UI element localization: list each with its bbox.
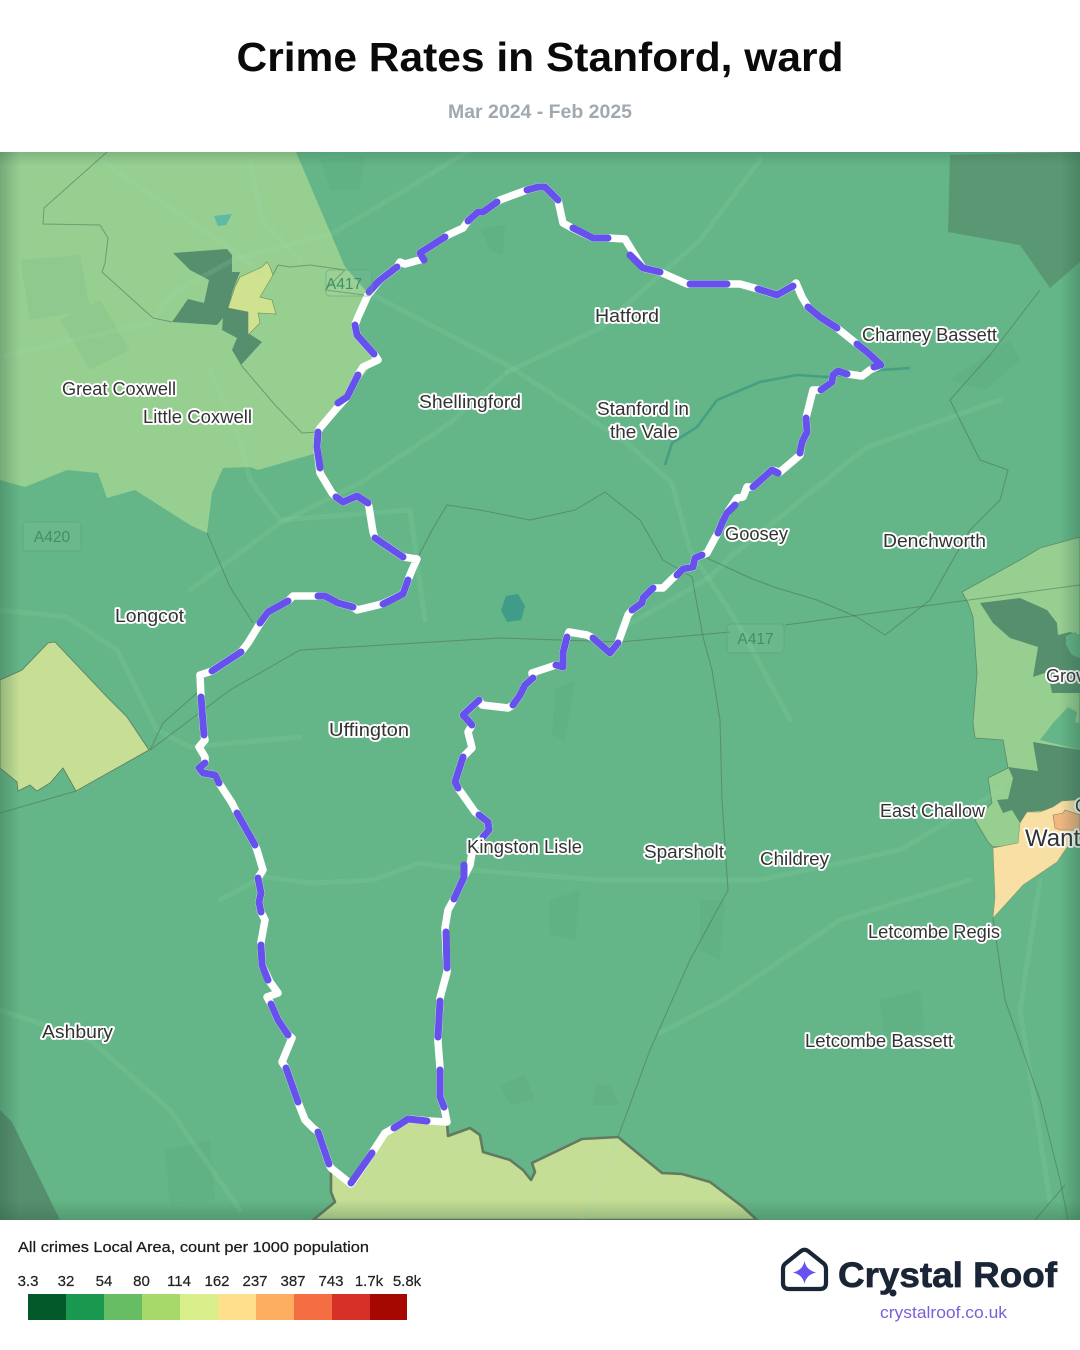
region: dark green low-crime patch north-west xyxy=(172,249,262,365)
place labels: Stanford in xyxy=(597,399,689,419)
icon: house with star xyxy=(783,1250,826,1289)
road network xyxy=(192,258,1046,1220)
place labels: Letcombe Bassett xyxy=(805,1031,953,1051)
road label boxes xyxy=(23,270,784,653)
legend scale labels: 32 xyxy=(58,1273,74,1290)
lake xyxy=(501,594,525,622)
place labels: Uffington xyxy=(329,720,409,740)
place labels: Childrey xyxy=(760,849,829,869)
legend scale labels: 237 xyxy=(242,1273,268,1290)
legend scale labels: 5.8k xyxy=(393,1273,422,1290)
road label: A417 north: A417 xyxy=(326,276,362,293)
legend scale labels: 114 xyxy=(167,1273,191,1290)
place labels: Sparsholt xyxy=(644,842,724,862)
pond xyxy=(214,214,232,226)
legend scale labels: 387 xyxy=(280,1273,306,1290)
road label: A417 north xyxy=(326,270,372,296)
choropleth map panel xyxy=(0,150,1080,1220)
logo: Crystal Roof xyxy=(783,1250,1057,1322)
place labels: Ashbury xyxy=(42,1022,113,1042)
thin area boundaries xyxy=(0,152,1080,1220)
place labels: Denchworth xyxy=(883,531,986,551)
road label: A417 centre xyxy=(727,624,784,653)
legend title: All crimes Local Area, count per 1000 population xyxy=(18,1239,369,1256)
road label: A420 xyxy=(23,522,81,551)
place labels: East Challow xyxy=(880,801,986,821)
logo wordmark: Crystal Roof xyxy=(838,1256,1057,1295)
region: light green east xyxy=(962,537,1080,847)
region: orange Wantage centre xyxy=(1053,810,1080,830)
place labels: Hatford xyxy=(595,306,659,326)
legend scale labels xyxy=(18,1273,422,1290)
logo y keyhole xyxy=(890,1290,896,1296)
region: dark green north-east xyxy=(948,152,1080,288)
place labels: Goosey xyxy=(725,524,788,544)
region: mid green east small xyxy=(1066,632,1080,658)
place labels: Shellingford xyxy=(419,392,521,412)
title: Crime Rates in Stanford, ward xyxy=(236,34,844,80)
place labels: Charney Bassett xyxy=(862,325,997,345)
region: dark green east upper xyxy=(980,598,1080,693)
legend xyxy=(18,1239,422,1320)
region: yellow patch north-west xyxy=(228,262,276,335)
website link: crystalroof.co.uk xyxy=(880,1303,1008,1322)
legend scale labels: 54 xyxy=(96,1273,112,1290)
region: light green north-west area xyxy=(0,152,377,533)
region: yellow-green south xyxy=(313,1119,757,1220)
map edge shading xyxy=(0,152,1080,1220)
legend scale labels: 3.3 xyxy=(18,1273,38,1290)
ward boundary: white outline with purple dashes xyxy=(199,187,881,1184)
place labels: Great Coxwell xyxy=(62,379,176,399)
road label: A417 centre: A417 xyxy=(737,631,774,648)
legend scale labels: 743 xyxy=(318,1273,344,1290)
place labels: Kingston Lisle xyxy=(467,837,582,857)
legend scale labels: 80 xyxy=(133,1273,150,1290)
road label: A420: A420 xyxy=(34,529,70,546)
region: peach Wantage xyxy=(993,800,1080,918)
region: dark green south-west corner xyxy=(0,1110,60,1220)
region: dark green east lower xyxy=(997,742,1080,823)
place labels: the Vale xyxy=(610,422,678,442)
place labels xyxy=(42,306,1080,1051)
legend colour bar xyxy=(28,1294,407,1320)
legend scale labels: 162 xyxy=(204,1273,230,1290)
place labels: Longcot xyxy=(115,606,184,626)
place labels: Letcombe Regis xyxy=(868,922,1000,942)
place labels: Little Coxwell xyxy=(143,407,252,427)
legend scale labels: 1.7k xyxy=(355,1273,384,1290)
subtitle: date range: Mar 2024 - Feb 2025 xyxy=(448,102,632,123)
region: yellow-green west xyxy=(0,642,149,791)
woodland and field patches xyxy=(20,155,1020,1205)
region: mid green east xyxy=(1040,707,1080,750)
river xyxy=(665,368,910,465)
